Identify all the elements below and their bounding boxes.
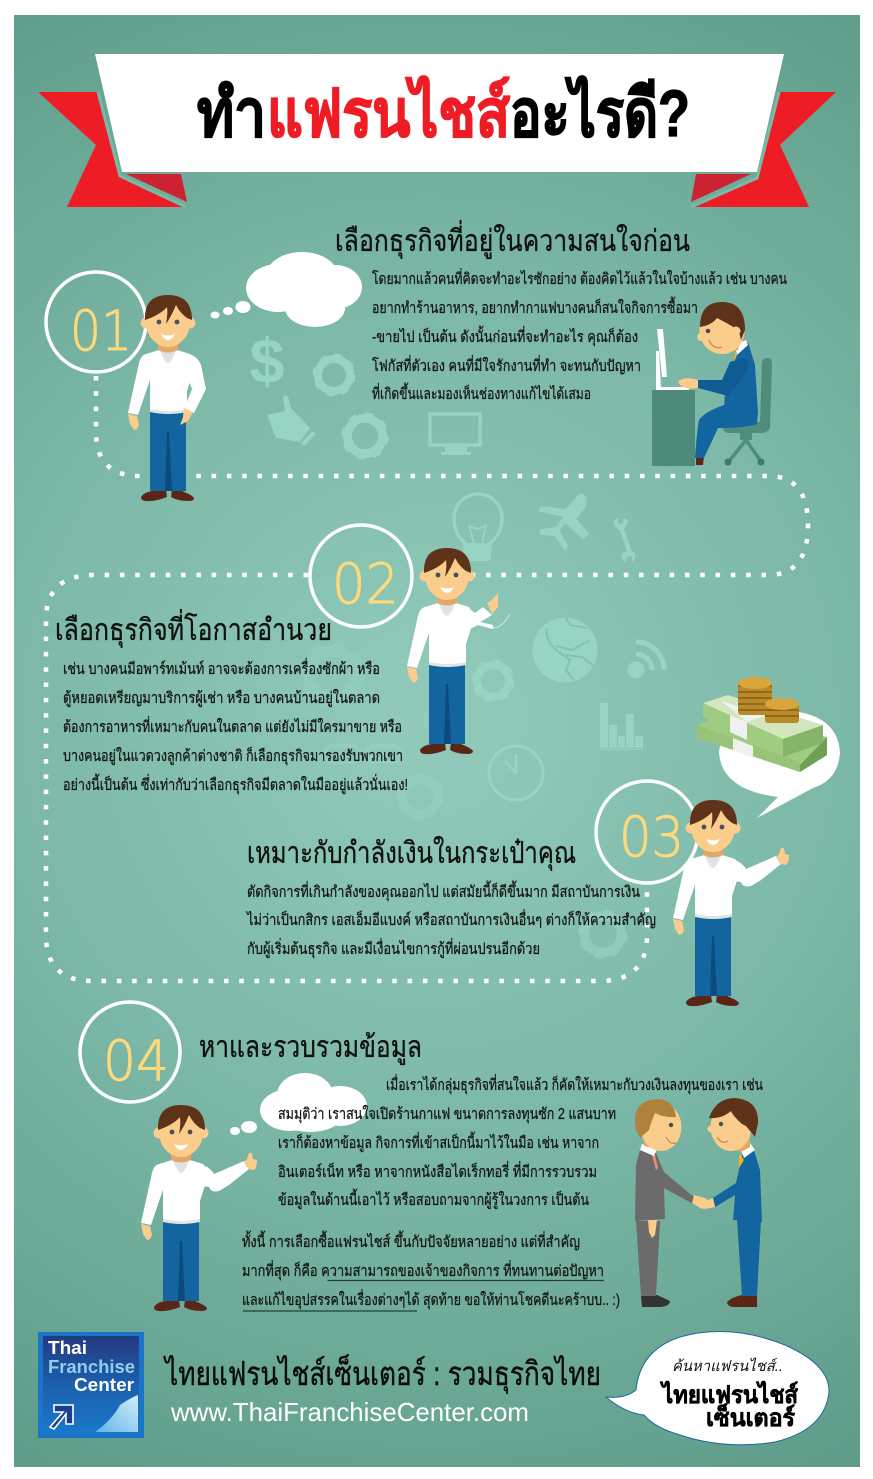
character 1 [128,295,206,501]
body 02: บางคนอยู่ในแวดวงลูกค้าต่างชาติ ก็เลือกธุรกิจมารองรับพวกเขา [63,746,403,766]
number badge 04 [80,1002,180,1102]
icon: bars [600,703,643,750]
body 04: เราก็ต้องหาข้อมูล กิจการที่เข้าสเป็กนี้มาไว้ในมือ เช่น หาจาก [278,1131,599,1153]
body 01: ที่เกิดขึ้นและมองเห็นช่องทางแก้ไขได้เสมอ [372,382,591,403]
body 03: กับผู้เริ่มต้นธุรกิจ และมีเงื่อนไขการกู้ที่ผ่อนปรนอีกด้วย [247,938,540,959]
icon: globe [532,618,598,682]
body 04: เมื่อเราได้กลุ่มธุรกิจที่สนใจแล้ว ก็คัดให้เหมาะกับวงเงินลงทุนของเรา เช่น [386,1074,763,1095]
title text: อะไรดี? [510,75,690,150]
icon: clock [489,746,543,800]
body 04: อินเตอร์เน็ท หรือ หาจากหนังสือไดเร็กทอรี่ ที่มีการรวบรวม [278,1161,597,1181]
closing paragraph: มากที่สุด ก็คือ ความสามารถของเจ้าของกิจการ ที่ทนทานต่อปัญหา [242,1260,604,1281]
icon: banknotes [697,695,827,772]
body 03 [245,880,656,959]
heading 02: เลือกธุรกิจที่โอกาสอำนวย [55,609,332,649]
title text: ทำ [197,76,266,150]
icon: gear large [304,646,362,704]
speech bubble: ไทยแฟรนไชส์ [659,1380,798,1409]
footer heading: ไทยแฟรนไชส์เซ็นเตอร์ : รวมธุรกิจไทย [163,1354,601,1394]
logo: Center [74,1375,134,1395]
body 04 [278,1074,763,1210]
title text: แฟรนไชส์ [267,75,511,150]
footer url: www.ThaiFranchiseCenter.com [170,1397,529,1427]
body 02: เช่น บางคนมีอพาร์ทเม้นท์ อาจจะต้องการเครื่องซักผ้า หรือ [63,658,380,678]
section 04 [80,1002,763,1311]
number badge 03: 03 [619,805,684,869]
icon: gear low [399,776,441,818]
logo [38,1332,144,1438]
closing paragraph: และแก้ไขอุปสรรคในเรื่องต่างๆได้ สุดท้าย ขอให้ท่านโชคดีนะคร้าบบ.. :) [242,1289,620,1310]
heading 03: เหมาะกับกำลังเงินในกระเป๋าคุณ [247,836,576,872]
icon: chain [325,746,401,762]
section 03 [245,677,840,1006]
footer [38,1332,829,1445]
speech bubble with money [697,677,840,818]
speech bubble: เซ็นเตอร์ [706,1403,795,1432]
icon: arrow [50,1405,73,1429]
body 01: อยากทำร้านอาหาร, อยากทำกาแฟบางคนก็สนใจกิจการซื้อมา [372,296,698,317]
background ghost icons [249,327,664,956]
number badge 04: 04 [103,1029,169,1093]
icon: gear right [581,912,625,956]
character 3 [673,800,789,1006]
left ribbon [38,92,186,207]
body 02: ต้องการอาหารที่เหมาะกับคนในตลาด แต่ยังไม่มีใครมาขาย หรือ [63,716,402,736]
speech bubble: ค้นหาแฟรนไชส์.. [672,1357,783,1375]
icon: gear two [344,415,386,457]
icon: gear three [474,662,512,700]
section 02 [55,525,510,795]
body 03: ตัดกิจการที่เกินกำลังของคุณออกไป แต่สมัยนี้ก็ดีขึ้นมาก มีสถาบันการเงิน [247,880,640,902]
number badge 01 [46,272,146,372]
icon: wrench [614,518,636,562]
body 02: อย่างนี้เป็นต้น ซึ่งเท่ากับว่าเลือกธุรกิจมีตลาดในมืออยู่แล้วนั่นเอง! [63,773,408,795]
body 02: ตู้หยอดเหรียญมาบริการผู้เช่า หรือ บางคนบ้านอยู่ในตลาด [63,689,380,708]
icon: airplane [540,495,588,549]
title banner [38,54,836,207]
icon: monitor [430,414,480,455]
number badge 02 [310,525,412,627]
body 01 [372,268,787,403]
office worker at desk [652,302,772,466]
body 04: ข้อมูลในด้านนี้เอาไว้ หรือสอบถามจากผู้รู้ในวงการ เป็นต้น [278,1188,589,1210]
icon: coins [738,677,799,723]
icon: light bulb [454,494,502,561]
number badge 03 [596,781,698,883]
body 03: ไม่ว่าเป็นกสิกร เอสเอ็มอีแบงค์ หรือสถาบันการเงินอื่นๆ ต่างก็ให้ความสำคัญ [245,909,656,929]
logo: Thai [48,1338,87,1358]
body 02 [63,658,408,795]
character 2 [407,548,510,754]
closing paragraph [242,1230,620,1311]
right ribbon [691,92,836,207]
logo: Franchise [48,1357,135,1377]
icon: dollar: $ [249,327,285,397]
body 04: สมมุติว่า เราสนใจเปิดร้านกาแฟ ขนาดการลงทุนซัก 2 แสนบาท [278,1105,616,1124]
closing paragraph: ทั้งนี้ การเลือกซื้อแฟรนไชส์ ขึ้นกับปัจจัยหลายอย่าง แต่ที่สำคัญ [242,1230,580,1251]
thought cloud 1 [210,252,362,327]
icon: thumb up [267,395,316,446]
white banner [95,54,784,172]
section 01 [46,220,787,501]
character 4 [141,1105,257,1311]
speech bubble [606,1332,829,1445]
body 01: -ขายไป เป็นต้น ดังนั้นก่อนที่จะทำอะไร คุณก็ต้อง [372,325,638,347]
icon: gear one [314,356,354,394]
number badge 02: 02 [332,552,399,616]
dotted route [46,376,808,981]
heading 01: เลือกธุรกิจที่อยู่ในความสนใจก่อน [335,220,690,260]
handshake characters [635,1098,762,1307]
icon: wifi [628,642,664,678]
heading 04: หาและรวบรวมข้อมูล [199,1031,422,1065]
body 01: โฟกัสที่ตัวเอง คนที่มีใจรักงานที่ทำ จะทนกับปัญหา [372,355,641,375]
thought cloud 4 [230,1073,367,1135]
number badge 01: 01 [70,299,132,363]
